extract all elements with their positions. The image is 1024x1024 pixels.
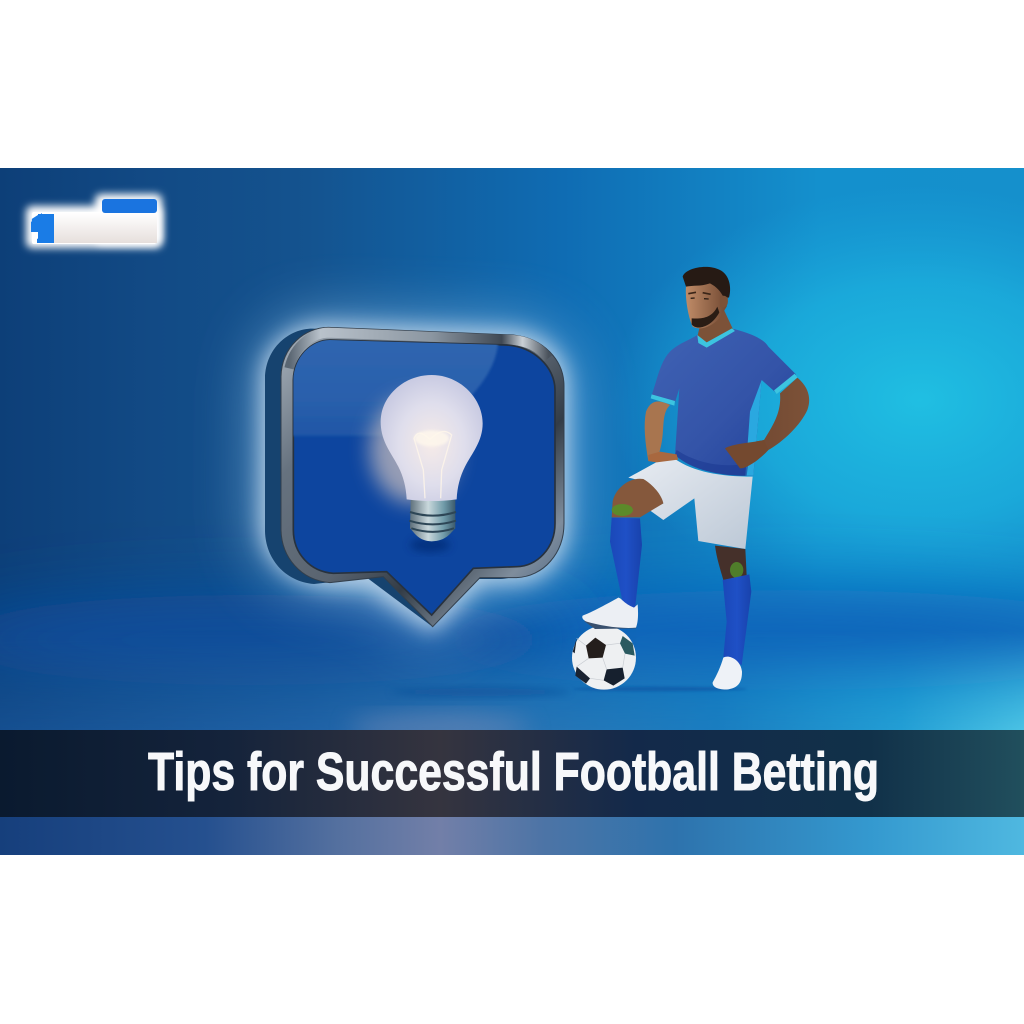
- jersey: [651, 328, 797, 476]
- right arm: [725, 378, 809, 468]
- bulb screw base: [409, 500, 456, 541]
- bulb filament: [414, 431, 452, 498]
- bubble back shell: [265, 329, 548, 625]
- raised leg sock: [610, 518, 642, 609]
- background panel: [0, 168, 1024, 730]
- shorts: [628, 458, 753, 549]
- title banner: [0, 730, 1024, 817]
- bubble blue panel: [290, 337, 555, 615]
- raised thigh: [612, 479, 663, 517]
- standing knee patch: [730, 562, 743, 578]
- logo: 1: [29, 205, 52, 252]
- knee patch: [612, 504, 633, 516]
- standing leg sock: [723, 574, 751, 665]
- bubble outer halo: [265, 328, 563, 627]
- bulb shadow: [410, 538, 450, 552]
- left hand: [648, 452, 678, 462]
- football player: [572, 267, 809, 691]
- speech bubble with light bulb: [265, 327, 564, 627]
- head: [683, 267, 730, 328]
- standing boot: [713, 657, 742, 689]
- raised boot: [582, 598, 638, 629]
- ground shadow: [573, 687, 747, 691]
- bubble metallic frame: [281, 327, 564, 627]
- right hand: [725, 440, 768, 468]
- bulb glow: [370, 397, 457, 503]
- standing lower leg: [715, 546, 747, 580]
- left arm: [645, 402, 678, 462]
- bulb glass: [381, 375, 483, 501]
- infographic scene: [0, 168, 1024, 855]
- neck: [697, 310, 733, 344]
- football: [572, 626, 636, 690]
- bubble wide glow: [265, 328, 563, 627]
- logo: [26, 194, 162, 252]
- lower background strip: [0, 817, 1024, 855]
